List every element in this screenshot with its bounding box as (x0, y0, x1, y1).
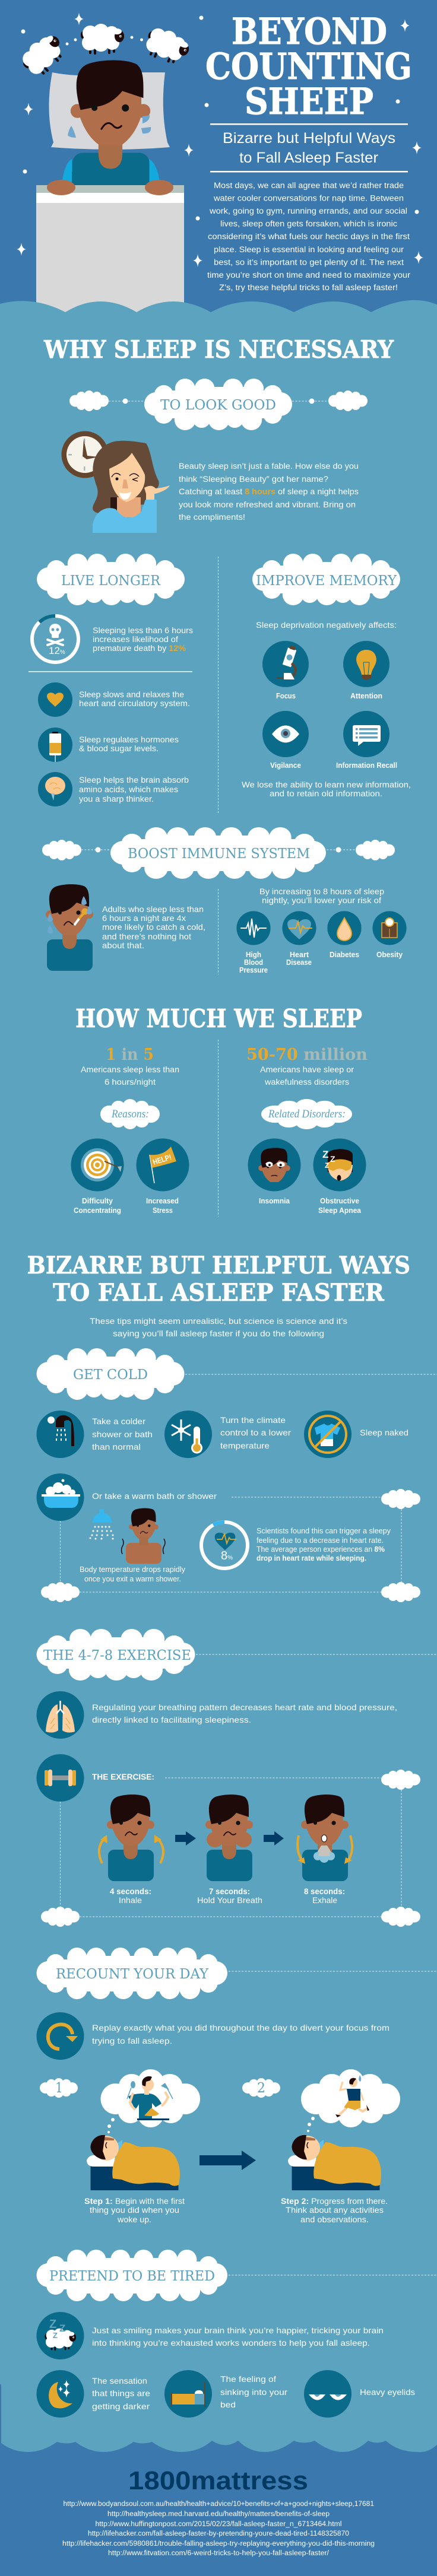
memory conclusion: We lose the ability to learn new information, (242, 780, 411, 789)
high blood pressure label: Blood (244, 958, 263, 967)
boost immune system banner: BOOST IMMUNE SYSTEM (128, 846, 310, 862)
12 percent text: Sleeping less than 6 hours (93, 625, 193, 635)
sick man text: more likely to catch a cold, (102, 922, 205, 932)
icon: target (71, 1138, 124, 1192)
live longer banner: LIVE LONGER (61, 573, 161, 589)
icon: obesity scale (372, 911, 407, 945)
stat: 50-70 million: wakefulness disorders (264, 1077, 349, 1087)
pretend text: Just as smiling makes your brain think you’re happier, tricking your brain (92, 2326, 384, 2335)
icon: help flag: HELP! (151, 1152, 172, 1167)
icon: sleep apnea with mask: Z (330, 1154, 335, 1164)
icon: no shirt (304, 1411, 352, 1458)
look good text: Catching at least 8 hours of sleep a night helps (179, 487, 359, 496)
memory conclusion (242, 780, 411, 798)
get cold banner (37, 1348, 437, 1400)
breathing text (92, 1702, 397, 1724)
shower head (89, 1509, 114, 1539)
sick man text (102, 904, 205, 950)
heart rate text: The average person experiences an 8% (256, 1545, 385, 1554)
breathing text: Regulating your breathing pattern decreases heart rate and blood pressure, (92, 1702, 397, 1712)
replay text: Replay exactly what you did throughout the day to divert your focus from (92, 2023, 390, 2032)
icon: sleep apnea with mask (314, 1138, 366, 1192)
obstructive sleep apnea label (318, 1197, 362, 1215)
obesity label: Obesity (376, 951, 403, 959)
intro text: considering it’s what fuels our hectic days in the first (208, 232, 410, 241)
title (205, 11, 412, 123)
increased stress label: Stress (153, 1206, 173, 1215)
memory intro: Sleep deprivation negatively affects: (256, 620, 397, 630)
intro text: Z’s, try these helpful tricks to fall asleep faster! (219, 283, 398, 292)
subtitle (210, 123, 408, 172)
pretend text: into thinking you’re exhausted works wonders to help you fall asleep. (92, 2338, 370, 2348)
pretend text (92, 2326, 384, 2348)
cold shower text: shower or bath (92, 1430, 153, 1439)
icon: sleeping sheep (37, 2312, 84, 2359)
icon: heart (38, 682, 72, 717)
pretend to be tired banner (37, 2250, 437, 2301)
icon: sleeping sheep: Z (53, 2331, 58, 2340)
arrow (200, 2151, 256, 2170)
intro text: place. Sleep is essential in looking and feeling our (214, 245, 404, 254)
related disorders cloud: Related Disorders: (268, 1108, 346, 1120)
icon: attention bulb (343, 641, 390, 687)
step 2 text (281, 2196, 388, 2224)
to look good banner (69, 379, 368, 430)
header illustration: sleepless man in bed counting sheep (17, 24, 193, 313)
sources: http://www.bodyandsoul.com.au/health/health+advice/10+benefits+of+a+good+nights+sleep,17681 (63, 2501, 374, 2508)
cold shower text: Take a colder (92, 1416, 145, 1426)
sick man illustration (46, 884, 93, 971)
icon: lungs (37, 1691, 84, 1739)
title: SHEEP (245, 81, 373, 123)
to look good banner: TO LOOK GOOD (160, 398, 276, 413)
high blood pressure label (239, 951, 268, 974)
replay text (92, 2023, 390, 2045)
heart disease label: Disease (286, 958, 312, 967)
thought cloud: running (301, 2069, 400, 2132)
icon: high blood pressure (236, 911, 271, 945)
intro text: water cooler conversations for nap time. Between (213, 193, 404, 203)
hormones text: & blood sugar levels. (79, 744, 159, 753)
high blood pressure label: Pressure (239, 966, 268, 974)
risk intro text: By increasing to 8 hours of sleep (259, 887, 384, 896)
icon: replay arrow (37, 2012, 84, 2060)
12 percent ring with skull (32, 616, 78, 662)
sleep naked text: Sleep naked (360, 1428, 408, 1437)
icon: sleep apnea with mask: Z (322, 1149, 328, 1160)
heart rate text (256, 1526, 391, 1562)
4-7-8 exercise banner: THE 4-7-8 EXERCISE (43, 1648, 191, 1663)
climate control text: Turn the climate (220, 1415, 286, 1425)
subtitle: Bizarre but Helpful Ways (223, 130, 395, 147)
pretend to be tired banner: PRETEND TO BE TIRED (49, 2269, 215, 2284)
breathing text: directly linked to facilitating sleepiness. (92, 1715, 251, 1724)
icon: help flag (137, 1138, 189, 1192)
step: hold your breath (197, 1794, 262, 1905)
stat: 50-70 million: Americans have sleep or (260, 1065, 354, 1074)
cold shower text: than normal (92, 1442, 141, 1451)
insomnia label: Insomnia (259, 1197, 290, 1205)
icon: sleeping sheep: Z (59, 2323, 65, 2334)
number 1 cloud: 1 (55, 2081, 63, 2096)
heart disease label: Heart (290, 951, 309, 959)
stat: 50-70 million: 50-70 million (246, 1046, 368, 1064)
body temperature text: Body temperature drops rapidly (80, 1565, 185, 1574)
look good text: you look more refreshed and vibrant. Bring on (179, 500, 356, 509)
12 percent text: increases likelihood of (93, 634, 178, 644)
obstructive sleep apnea label: Sleep Apnea (318, 1206, 362, 1215)
heart rate text: Scientists found this can trigger a sleepy (256, 1526, 391, 1535)
difficulty concentrating label: Concentrating (74, 1206, 121, 1215)
related disorders cloud (261, 1099, 352, 1129)
improve memory banner: IMPROVE MEMORY (256, 573, 397, 589)
intro text (207, 181, 411, 292)
the exercise label: THE EXERCISE: (92, 1772, 154, 1781)
12 percent ring with skull: 12% (49, 645, 65, 656)
8 percent heart ring (201, 1522, 248, 1568)
thought cloud: eating breakfast (101, 2069, 200, 2133)
sinking text: sinking into your (220, 2387, 287, 2397)
step: hold your breath: 7 seconds: (209, 1886, 250, 1896)
increased stress label (146, 1197, 179, 1215)
vigilance label: Vigilance (270, 761, 301, 770)
body temperature text (80, 1565, 185, 1583)
12 percent text: premature death by 12% (93, 643, 186, 653)
tips intro: saying you’ll fall asleep faster if you do the following (113, 1329, 324, 1338)
tips intro: These tips might seem unrealistic, but science is science and it’s (90, 1316, 347, 1326)
look good text: the compliments! (179, 512, 245, 522)
step: exhale: 8 seconds: (304, 1886, 345, 1896)
stat: 50-70 million (246, 1046, 368, 1087)
obstructive sleep apnea label: Obstructive (320, 1197, 359, 1205)
stars and dots (17, 12, 423, 267)
title: COUNTING (205, 46, 412, 88)
stat: 1 in 5: 6 hours/night (104, 1077, 156, 1087)
step 1 text: Step 1: Begin with the first (84, 2196, 185, 2206)
step 1 text: woke up. (117, 2215, 151, 2224)
12 percent text (93, 625, 193, 653)
icon: heavy eyelids (304, 2370, 352, 2418)
heading: why sleep is necessary: WHY SLEEP IS NECESSARY (43, 335, 394, 364)
sources: http://lifehacker.com/5980861/trouble-falling-asleep-try-replaying-everything-you-did-this-morning (62, 2540, 375, 2548)
sources: http://lifehacker.com/fall-asleep-faster-by-pretending-youre-dead-tired-1148325870 (88, 2530, 349, 2537)
focus label: Focus (276, 692, 296, 700)
boost immune system banner (42, 827, 395, 879)
icon: bath (37, 1473, 84, 1521)
sleeper in bed, step 2 (288, 2135, 381, 2190)
icon: bed (164, 2370, 212, 2418)
icon: insomnia face (248, 1138, 300, 1192)
number 2 cloud (242, 2078, 280, 2098)
reasons cloud: Reasons: (111, 1108, 149, 1120)
sleeper in bed, step 1 (87, 2135, 180, 2190)
heart disease label (286, 951, 312, 967)
heart text: heart and circulatory system. (79, 698, 190, 708)
cold shower text (92, 1416, 153, 1451)
icon: sleep apnea with mask: Z (325, 1161, 329, 1170)
sinking text (220, 2374, 287, 2409)
woman with clock illustration (62, 431, 170, 533)
warm bath text: Or take a warm bath or shower (92, 1491, 217, 1501)
look good text: think “Sleeping Beauty” got her name? (179, 474, 328, 484)
brain text: Sleep helps the brain absorb (79, 775, 189, 784)
tips intro (90, 1316, 347, 1338)
logo: 1800mattress: 1800mattress (128, 2466, 308, 2495)
brain text: you a sharp thinker. (79, 794, 154, 803)
heading: bizarre but helpful ways: BIZARRE BUT HELPFUL WAYS (27, 1252, 410, 1279)
difficulty concentrating label (74, 1197, 121, 1215)
sinking text: The feeling of (220, 2374, 276, 2384)
dashed frame: warm bath (41, 1489, 420, 1602)
body temperature text: once you exit a warm shower. (84, 1574, 181, 1583)
icon: information recall (343, 711, 390, 757)
risk intro text: nightly, you’ll lower your risk of (262, 895, 381, 905)
icon: diabetes drop (327, 911, 362, 945)
look good text (179, 461, 359, 522)
icon: dumbbell (37, 1754, 84, 1802)
brain text: amino acids, which makes (79, 784, 178, 794)
sources: http://www.fitvation.com/6-weird-tricks-to-help-you-fall-asleep-faster/ (108, 2550, 330, 2557)
intro text: Most days, we can all agree that we’d rather trade (214, 181, 404, 190)
climate control text: control to a lower (220, 1428, 291, 1437)
sick man text: Adults who sleep less than (102, 904, 204, 914)
heart text (79, 690, 190, 708)
8 percent heart ring: 8% (221, 1549, 233, 1562)
attention label: Attention (350, 692, 382, 700)
arrow (175, 1831, 196, 1846)
step: inhale: Inhale (119, 1895, 142, 1905)
pillow (49, 72, 170, 150)
step 2 text: Step 2: Progress from there. (281, 2196, 388, 2206)
get cold banner: GET COLD (73, 1367, 148, 1383)
reasons cloud (100, 1099, 160, 1129)
heart text: Sleep slows and relaxes the (79, 690, 184, 699)
intro text: best, so it’s important to get plenty of it. The next (214, 258, 404, 267)
intro text: time you’re short on time and need to maximize your (207, 271, 411, 279)
brain text (79, 775, 189, 803)
icon: iv bag (38, 728, 72, 762)
heading: bizarre but helpful ways (27, 1252, 410, 1307)
step: exhale (297, 1794, 352, 1905)
darker text (92, 2376, 150, 2411)
step: inhale: 4 seconds: (110, 1886, 151, 1896)
woman (93, 441, 170, 533)
recount your day banner (37, 1948, 437, 1999)
icon: vigilance eye (262, 711, 309, 757)
heading: how much we sleep: HOW MUCH WE SLEEP (75, 1004, 362, 1033)
intro text: lives, sleep often gets forsaken, which is ironic (220, 220, 397, 228)
heading: bizarre but helpful ways: TO FALL ASLEEP FASTER (53, 1279, 385, 1307)
hormones text (79, 735, 179, 753)
shivering man (121, 1508, 165, 1564)
title: BEYOND (232, 11, 387, 53)
blanket (36, 185, 184, 313)
stat: 1 in 5: Americans sleep less than (81, 1065, 179, 1074)
icon: focus microscope (262, 641, 309, 687)
sinking text: bed (220, 2400, 236, 2409)
improve memory banner (252, 554, 400, 605)
subtitle: to Fall Asleep Faster (239, 150, 378, 166)
icon: cold shower (37, 1411, 84, 1458)
difficulty concentrating label: Difficulty (82, 1197, 113, 1205)
icon: heart disease (282, 911, 316, 945)
step 2 text: and observations. (300, 2215, 369, 2224)
step: inhale (99, 1794, 163, 1905)
heart rate text: feeling due to a decrease in heart rate. (256, 1536, 384, 1545)
arrow (264, 1831, 284, 1846)
step 1 text: thing you did when you (90, 2205, 179, 2215)
icon: sleeping sheep: Z (49, 2318, 56, 2331)
heavy eyelids text: Heavy eyelids (360, 2387, 415, 2397)
panel: improve memory (242, 554, 411, 798)
hormones text: Sleep regulates hormones (79, 735, 179, 744)
step 1 text (84, 2196, 185, 2224)
sheep (17, 24, 193, 81)
number 1 cloud (40, 2078, 78, 2098)
memory conclusion: and to retain old information. (270, 789, 382, 798)
step: hold your breath: Hold Your Breath (197, 1895, 262, 1905)
darker text: The sensation (92, 2376, 147, 2386)
recount your day banner: RECOUNT YOUR DAY (56, 1967, 209, 1982)
climate control text (220, 1415, 291, 1450)
clock (62, 431, 108, 478)
diabetes label: Diabetes (330, 951, 359, 959)
icon: brain (38, 772, 72, 806)
information recall label: Information Recall (336, 761, 397, 770)
icon: moon and stars (37, 2370, 84, 2418)
intro text: work, going to gym, running errands, and our social (209, 207, 407, 215)
sick man text: and there’s nothing hot (102, 932, 191, 941)
darker text: that things are (92, 2388, 150, 2398)
hands (47, 180, 173, 195)
sources: http://healthysleep.med.harvard.edu/healthy/matters/benefits-of-sleep (107, 2511, 330, 2518)
step 2 text: Think about any activities (286, 2205, 384, 2215)
panel: live longer (28, 554, 193, 806)
replay text: trying to fall asleep. (92, 2036, 172, 2045)
sick man text: about that. (102, 941, 144, 950)
sources (62, 2501, 375, 2557)
stat: 1 in 5: 1 in 5 (106, 1046, 154, 1064)
man (62, 61, 160, 206)
look good text: Beauty sleep isn’t just a fable. How else do you (179, 461, 359, 471)
heart rate text: drop in heart rate while sleeping. (256, 1554, 366, 1562)
increased stress label: Increased (146, 1197, 179, 1205)
4-7-8 exercise banner (37, 1629, 437, 1681)
high blood pressure label: High (246, 951, 261, 959)
dashed frame: exercise (41, 1770, 420, 1927)
icon: snowflake and thermometer (164, 1411, 212, 1458)
number 2 cloud: 2 (257, 2081, 265, 2096)
climate control text: temperature (220, 1441, 270, 1450)
stat: 1 in 5 (81, 1046, 179, 1087)
darker text: getting darker (92, 2402, 150, 2411)
sources: http://www.huffingtonpost.com/2015/02/23/fall-asleep-faster_n_6713464.html (95, 2521, 342, 2528)
live longer banner (37, 554, 185, 605)
sick man text: 6 hours a night are 4x (102, 913, 186, 923)
step: exhale: Exhale (312, 1895, 337, 1905)
risk intro text (259, 887, 384, 905)
